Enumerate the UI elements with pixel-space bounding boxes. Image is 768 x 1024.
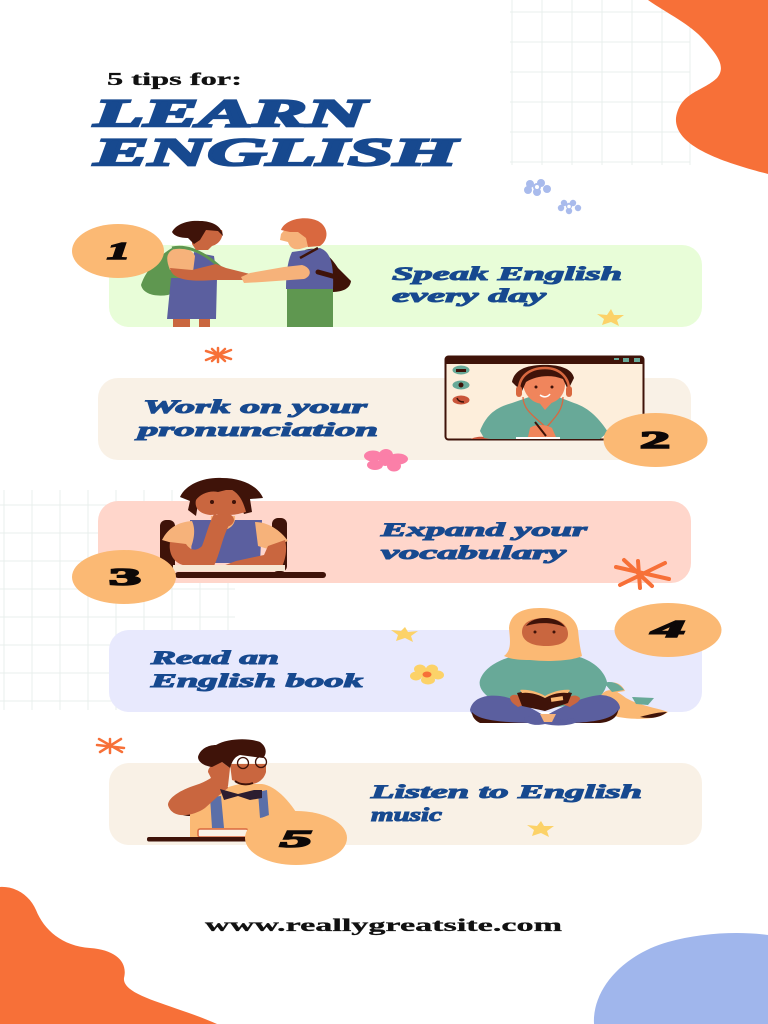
tip text: vocabulary [381,543,567,564]
subtitle: 5 tips for: [107,69,242,89]
icon: yellow star [597,309,624,326]
number badge 5: 5 [280,827,312,853]
panel: tip 1 [72,218,702,327]
blob: bottom left orange [0,887,217,1024]
tip text [369,782,642,826]
panel: tip 2 [98,356,708,467]
panel: tip 4 [109,603,722,725]
illustration: boy with glasses at table [147,739,304,842]
number badge 2 [604,413,708,467]
illustration: girl thinking at table [160,478,326,578]
website url: www.reallygreatsite.com [205,915,562,935]
tip text: Work on your [143,397,368,418]
tip text [149,648,364,692]
illustration: girl in headscarf reading [470,608,668,725]
number badge 4: 4 [649,617,685,643]
tip text: Speak English [392,264,622,285]
panel: tip 3 [72,478,691,604]
icon: yellow flower [410,664,444,684]
tip text: every day [392,286,547,307]
icon: orange asterisk [97,739,124,753]
illustration: two children shaking hands [141,218,351,327]
tip text: pronunciation [134,420,378,441]
number badge 1 [72,224,164,278]
number badge 2: 2 [640,428,670,454]
title: ENGLISH [92,131,460,174]
icon: pink flower [364,449,408,472]
icon: blue flowers [524,179,581,214]
tip text: Expand your [379,520,588,541]
blob: top right orange [648,0,768,174]
icon: yellow star [391,627,418,642]
number badge 3 [72,550,176,604]
tip text [134,397,378,441]
number badge 3: 3 [109,565,141,591]
title [92,92,460,174]
number badge 1: 1 [107,239,130,265]
tip text: English book [149,671,364,692]
number badge 4 [614,603,722,657]
blob: bottom right blue [594,933,768,1024]
tip text [392,264,622,307]
tip text: Listen to English [369,782,642,803]
icon: yellow star [527,821,554,837]
panel: tip 5 [109,739,702,865]
icon: large orange asterisk [616,560,669,588]
tip text: music [371,805,443,826]
tip text: Read an [149,648,279,669]
number badge 5 [245,811,347,865]
tip text [379,520,588,564]
icon: orange asterisk [206,348,231,362]
title: LEARN [92,92,370,135]
illustration: video call window [445,356,644,440]
